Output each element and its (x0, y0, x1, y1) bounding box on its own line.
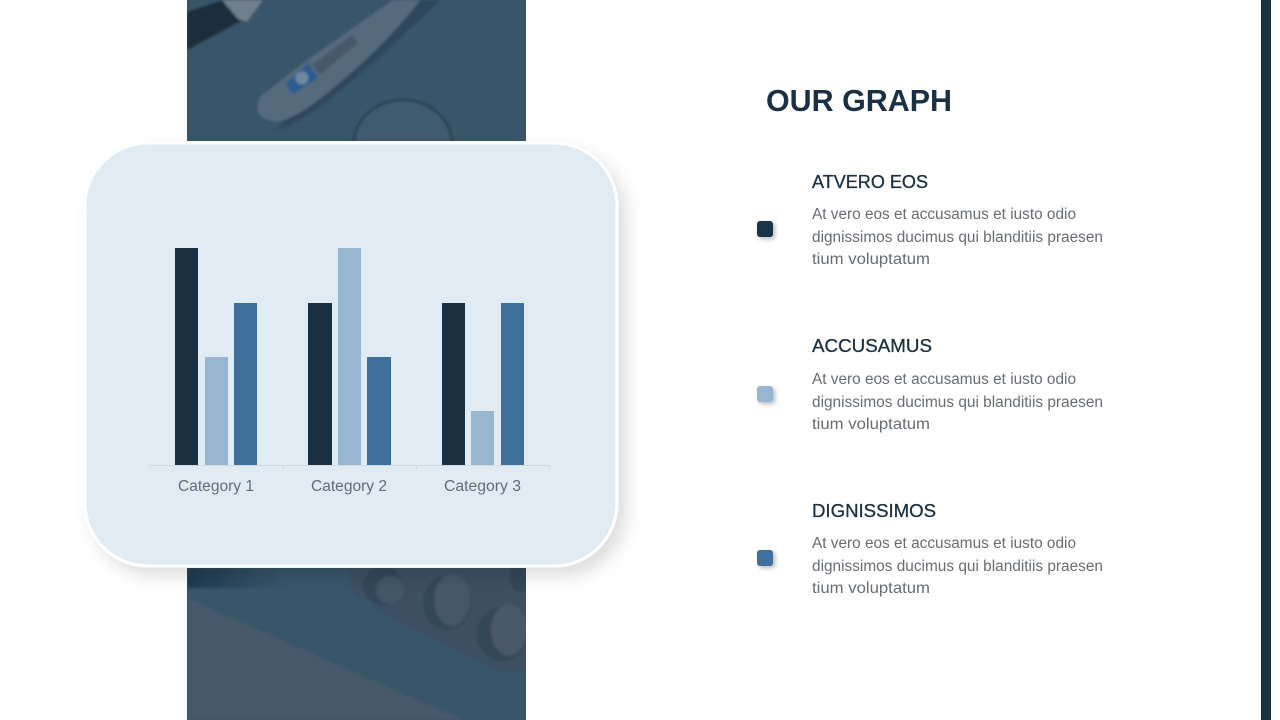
photo strip bottom: blister pack and paper (187, 564, 530, 720)
item: at vero eos (757, 172, 1103, 268)
bars: category 3 (442, 303, 524, 465)
text block: At vero eos et accusamus et iusto odio (812, 371, 1076, 388)
text block: tium voluptatum (812, 416, 930, 433)
text block: At vero eos et accusamus et iusto odio (812, 535, 1076, 552)
category labels: Category 3 (444, 478, 521, 495)
text block: dignissimos ducimus qui blanditiis praesen (812, 394, 1103, 411)
right edge bar (1261, 0, 1271, 720)
bar chart (150, 248, 550, 495)
chart panel (85, 143, 617, 566)
text block: tium voluptatum (812, 580, 930, 597)
text block: dignissimos ducimus qui blanditiis praesen (812, 558, 1103, 575)
axis (150, 465, 550, 469)
item: dignissimos (757, 501, 1103, 597)
item: accusamus (757, 336, 1103, 433)
text block (812, 371, 1103, 433)
heading: dignissimos: DIGNISSIMOS (812, 501, 936, 521)
category labels (178, 478, 521, 495)
bars: category 2 (308, 248, 391, 465)
text block (812, 535, 1103, 597)
text block: dignissimos ducimus qui blanditiis praesen (812, 229, 1103, 246)
photo strip top: thermometer and stethoscope (187, 0, 526, 141)
text block: tium voluptatum (812, 251, 930, 268)
category labels: Category 2 (311, 478, 387, 495)
title: OUR GRAPH (766, 83, 952, 118)
icon: light blue square (757, 386, 773, 402)
icon: dark square (757, 221, 773, 237)
category labels: Category 1 (178, 478, 254, 495)
bars: category 1 (175, 248, 257, 465)
text block: At vero eos et accusamus et iusto odio (812, 206, 1076, 223)
icon: mid blue square (757, 550, 773, 566)
heading: accusamus: ACCUSAMUS (812, 336, 932, 356)
heading: at vero eos: ATVERO EOS (812, 172, 928, 192)
text block (812, 206, 1103, 268)
